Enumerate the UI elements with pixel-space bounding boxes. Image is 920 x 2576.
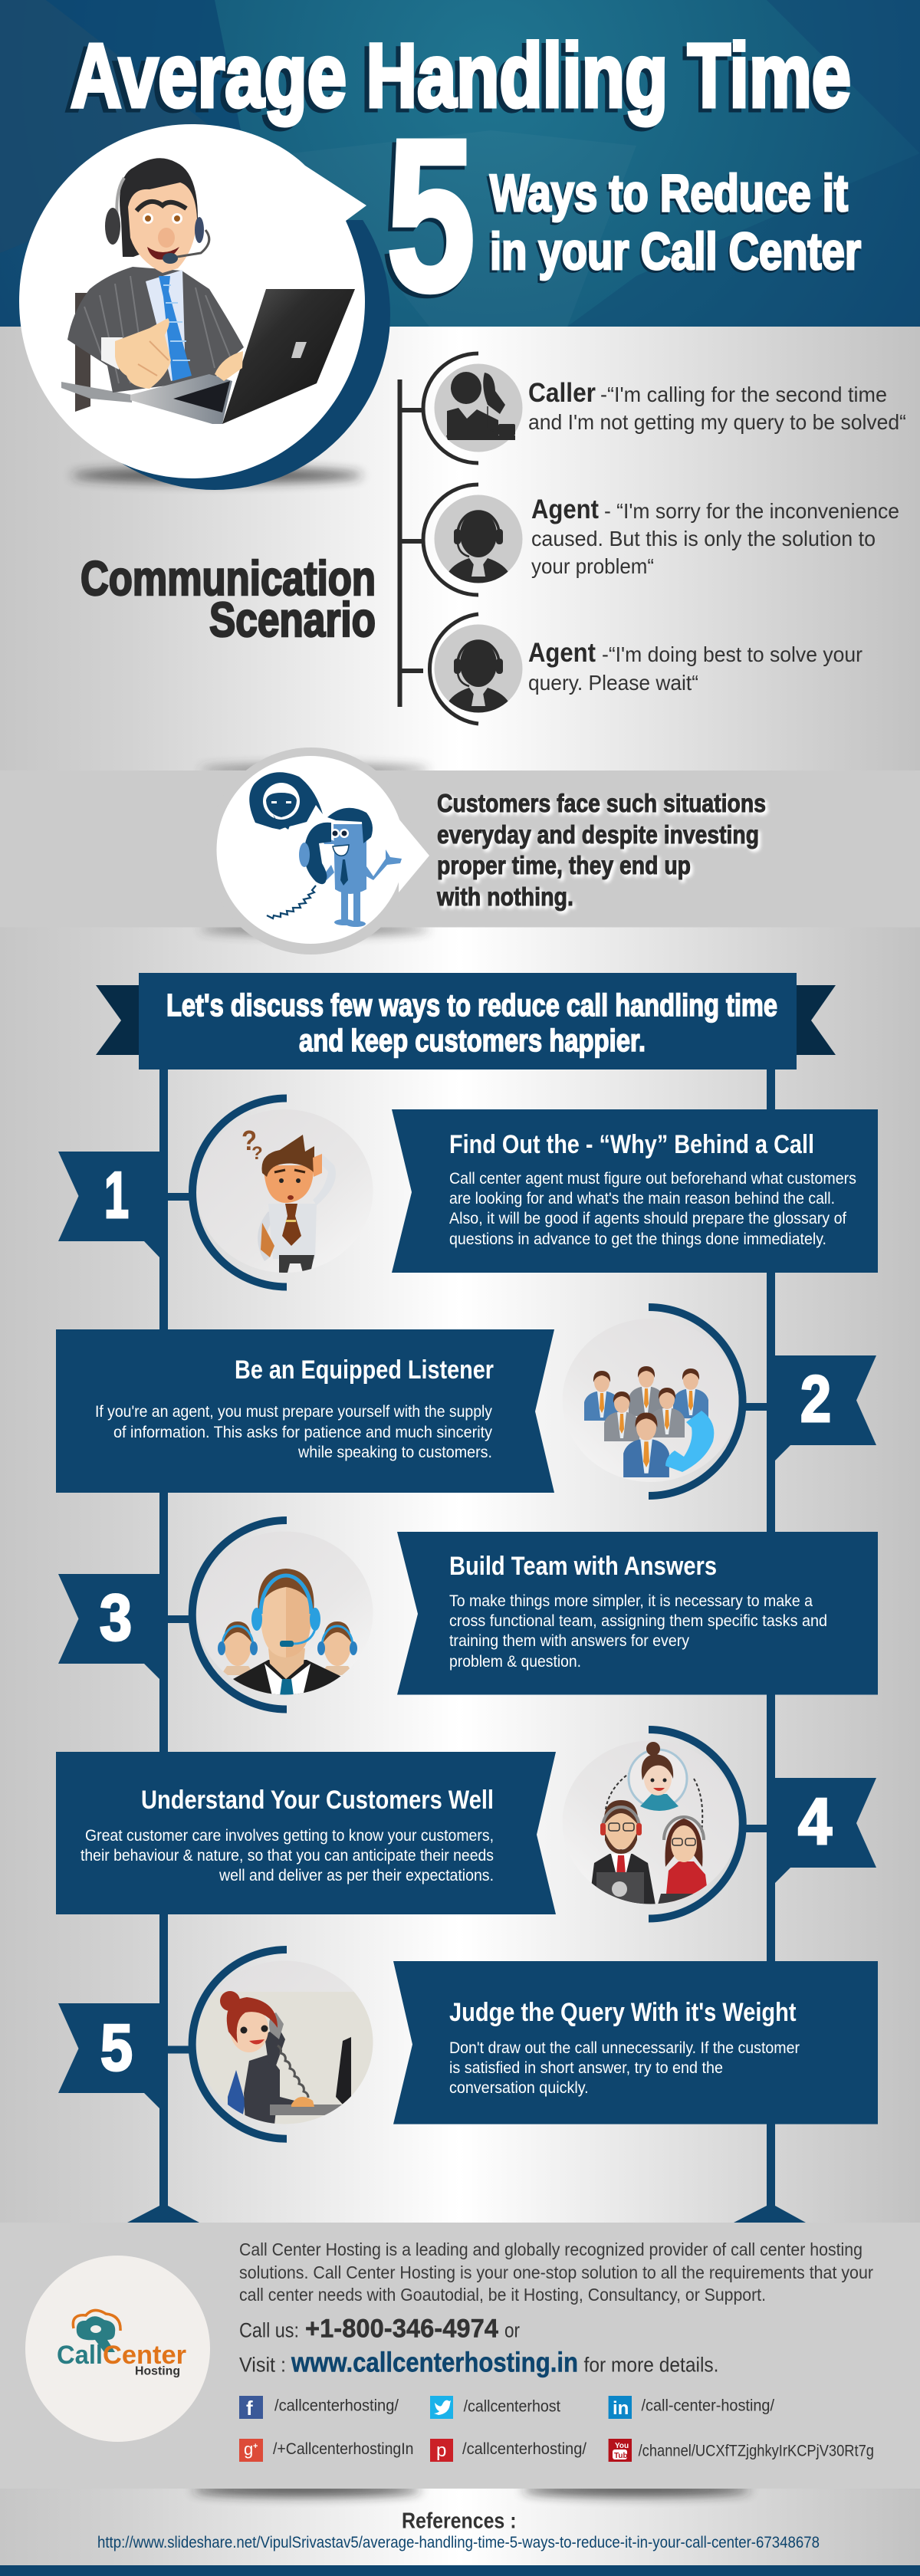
icon: agent on line (249, 772, 323, 830)
text: caller quote: and I'm not getting my query to be solved“ (528, 410, 906, 434)
scenario: caller (423, 353, 906, 463)
step 2 (56, 1307, 876, 1496)
ribbon number 2: 2 (800, 1363, 831, 1436)
text: customers statement: with nothing. (436, 882, 573, 911)
ribbon number 1 (58, 1152, 168, 1257)
step 5 (58, 1950, 878, 2139)
step 1 (58, 1098, 878, 1286)
text: company description: Call Center Hosting is a leading and globally recognized provider of call center hosting (239, 2239, 863, 2259)
text: agent quote one: Agent (531, 495, 599, 524)
social: pinterest: p (436, 2440, 446, 2461)
connector and arc (168, 1520, 287, 1710)
connector and arc (649, 1307, 767, 1496)
panel: step 1 text: Call center agent must figure out beforehand what customers (449, 1170, 856, 1188)
illustration: confused man: ? (251, 1143, 263, 1164)
subtitle: big 5: 5 (382, 98, 474, 340)
step 3 (58, 1520, 878, 1710)
text: agent quote one: - “I'm sorry for the inconvenience (604, 499, 899, 523)
text: agent quote two: query. Please wait“ (528, 671, 698, 695)
panel: company footer (0, 2223, 920, 2489)
panel: step 2 text: If you're an agent, you must prepare yourself with the supply (95, 1403, 492, 1421)
social: facebook: /callcenterhosting/ (274, 2397, 399, 2415)
panel: step 1 text (392, 1109, 878, 1273)
panel: step 2 text: while speaking to customers. (297, 1444, 492, 1461)
social: facebook (239, 2396, 399, 2420)
header background (0, 0, 920, 327)
panel: step 3 text: To make things more simpler, it is necessary to make a (449, 1592, 813, 1610)
text: phone: or (504, 2319, 520, 2342)
logo (25, 2256, 210, 2442)
panel: step 5 text: conversation quickly. (449, 2079, 589, 2097)
panel: step 1 text: Find Out the - “Why” Behind a Call (449, 1130, 814, 1159)
text: caller quote: -“I'm calling for the second time (600, 383, 887, 406)
social: twitter: /callcenterhost (464, 2398, 560, 2416)
ribbon number 4 (767, 1778, 876, 1883)
subtitle: big 5: 5 (386, 94, 475, 336)
panel: step 3 text: problem & question. (449, 1653, 581, 1671)
illustration: team and phone (571, 1343, 739, 1482)
text: agent quote two (528, 638, 863, 695)
connector and arc (168, 1950, 287, 2139)
heading: communication scenario: Communication (80, 552, 376, 606)
panel: step 3 text: cross functional team, assigning them specific tasks and (449, 1612, 827, 1630)
social: pinterest: /callcenterhosting/ (462, 2440, 586, 2458)
ribbon number 2 (767, 1355, 876, 1460)
footer strip (0, 2565, 920, 2576)
panel: step 1 text: questions in advance to get the things done immediately. (449, 1230, 826, 1248)
ribbon number 3: 3 (100, 1582, 132, 1654)
text: agent quote one: your problem“ (531, 554, 654, 578)
panel: step 2 text (56, 1329, 554, 1493)
logo: Hosting (135, 2364, 180, 2378)
social: google plus: /+CallcenterhostingIn (273, 2440, 414, 2458)
text: company description: solutions. Call Center Hosting is your one-stop solution to all the requirements that your (239, 2262, 873, 2282)
illustration: woman on phone (220, 1967, 373, 2124)
scenario: agent reply two (429, 614, 863, 724)
bubble ground shadow (71, 468, 363, 483)
ribbon number 1: 1 (104, 1159, 129, 1232)
timeline: scenario (400, 380, 423, 707)
panel: step 4 text: Great customer care involves getting to know your customers, (85, 1827, 494, 1845)
text: agent quote two: Agent (528, 638, 596, 668)
social: youtube: Tube (614, 2452, 632, 2460)
icon: agent headset (449, 510, 508, 583)
social: youtube (609, 2439, 874, 2462)
social: facebook: f (246, 2397, 253, 2420)
text: customers statement: Customers face such situations (437, 789, 766, 817)
ribbon number 3 (58, 1574, 168, 1679)
social: youtube: /channel/UCXfTZjghkyIrKCPjV30Rt7g (639, 2443, 874, 2460)
panel: step 5 text: Judge the Query With it's Weight (449, 1998, 796, 2027)
illustration: customer and agents (571, 1742, 739, 1904)
icon: man on phone (267, 808, 402, 927)
social: pinterest (430, 2439, 586, 2462)
heading: communication scenario: Scenario (209, 593, 376, 647)
text: caller quote (528, 378, 906, 434)
panel: step 5 text: is satisfied in short answer, try to end the (449, 2059, 723, 2077)
connector and arc (649, 1730, 767, 1918)
panel: step 5 text: Don't draw out the call unnecessarily. If the customer (449, 2039, 800, 2057)
ribbon number 5: 5 (100, 2012, 133, 2085)
icon: agent headset two (449, 639, 508, 713)
subtitle: ways to reduce (488, 164, 861, 283)
ribbon number 4: 4 (798, 1786, 832, 1858)
social: google plus: + (253, 2442, 258, 2451)
social: google plus (239, 2439, 414, 2462)
text: phone: Call us: (239, 2319, 299, 2342)
illustration: confused man: ? (242, 1125, 257, 1156)
text: website: www.callcenterhosting.in (291, 2346, 578, 2378)
panel: step 1 text: are looking for and what's the main reason behind the call. (449, 1190, 835, 1208)
social: google plus: g (244, 2440, 253, 2459)
text: phone: +1-800-346-4974 (305, 2315, 498, 2344)
connector and arc (168, 1098, 287, 1286)
logo: Center (103, 2341, 186, 2370)
text: website: for more details. (584, 2354, 719, 2377)
panel: step 3 text: training them with answers for every (449, 1632, 689, 1650)
social: twitter (430, 2396, 560, 2419)
social: linkedin: in (613, 2398, 629, 2419)
panel: step 3 text (397, 1532, 878, 1694)
panel: step 4 text: their behaviour & nature, so that you can anticipate their needs (80, 1847, 494, 1865)
text: caller quote: Caller (528, 378, 596, 408)
step 4 (56, 1730, 876, 1918)
text: customers statement: proper time, they end up (437, 851, 691, 879)
panel: step 2 text: Be an Equipped Listener (235, 1355, 494, 1385)
panel: customers band (0, 748, 920, 955)
text: agent quote one: caused. But this is only the solution to (531, 527, 876, 550)
references (97, 2509, 820, 2551)
speech bubble with agent (19, 124, 390, 490)
social: linkedin: /call-center-hosting/ (641, 2397, 774, 2415)
icon: agent at laptop (61, 158, 355, 424)
panel: step 3 text: Build Team with Answers (449, 1552, 717, 1581)
footer shadows (192, 2484, 751, 2496)
scenario: agent reply one (423, 485, 899, 595)
illustration: confused man (196, 1109, 373, 1273)
text: website: Visit : (239, 2354, 286, 2377)
references: http://www.slideshare.net/VipulSrivastav5/average-handling-time-5-ways-to-reduce-it-in-your-call-center-67348678 (97, 2533, 820, 2551)
banner: Let's discuss few ways to reduce call handling time (166, 987, 777, 1023)
panel: step 5 text (393, 1961, 878, 2124)
illustration: call center team (196, 1532, 373, 1698)
text: customers statement (436, 789, 768, 913)
timeline rails (127, 1070, 806, 2223)
text: agent quote two: -“I'm doing best to solve your (602, 642, 863, 666)
social: youtube: You (615, 2442, 629, 2450)
text: customers statement: everyday and despite investing (437, 820, 759, 849)
text: customers statement: Customers face such situations (439, 791, 768, 820)
social: linkedin (609, 2396, 774, 2419)
panel: step 1 text: Also, it will be good if agents should prepare the glossary of (449, 1210, 846, 1227)
logo: Call (57, 2341, 103, 2370)
text: company description: call center needs with Goautodial, be it Hosting, Consultancy, or Support. (239, 2285, 766, 2305)
text: website (239, 2346, 719, 2378)
references: References : (402, 2509, 517, 2534)
text: customers statement: proper time, they end up (439, 853, 693, 882)
panel: step 4 text (56, 1752, 556, 1914)
panel: step 4 text: Understand Your Customers Well (141, 1786, 494, 1815)
ribbon number 5 (58, 2003, 168, 2108)
banner (96, 973, 836, 1070)
text: company description (239, 2239, 873, 2305)
panel: step 2 text: of information. This asks for patience and much sincerity (113, 1424, 492, 1441)
icon: caller (446, 372, 515, 440)
panel: step 4 text: well and deliver as per their expectations. (219, 1867, 494, 1884)
text: customers statement: with nothing. (439, 885, 576, 913)
heading: communication scenario (80, 552, 376, 647)
band shadows (199, 765, 429, 935)
text: customers statement: everyday and despite investing (439, 823, 761, 851)
banner: and keep customers happier. (299, 1023, 646, 1058)
text: agent quote one (531, 495, 899, 578)
